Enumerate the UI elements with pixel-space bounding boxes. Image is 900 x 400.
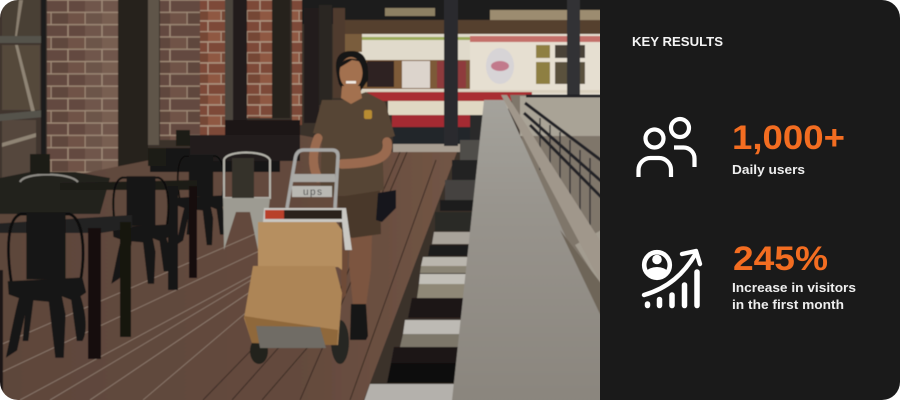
- background: ceiling and wall: [0, 0, 610, 400]
- upper box: [258, 222, 342, 270]
- steel bins along bench: [361, 115, 484, 400]
- label: increase in visitors: Increase in visitors: [732, 280, 856, 295]
- wooden deck floor: [0, 135, 457, 400]
- ups plate: ups: [303, 187, 322, 198]
- stat: 1,000+: 1,000+: [732, 119, 845, 157]
- label: increase in visitors: in the first month: [732, 297, 844, 312]
- railing and area right of bench: [510, 94, 600, 283]
- cafe tables and chairs: [0, 120, 300, 400]
- hand cart with boxes: [244, 150, 352, 364]
- lower box: [244, 266, 342, 345]
- shorts: [337, 188, 381, 238]
- arms: [313, 138, 387, 178]
- base plate: [256, 326, 326, 348]
- wooden bench top: [451, 95, 610, 400]
- panel: key results: [600, 0, 900, 400]
- UPS badge: [364, 110, 372, 119]
- stat: 245%: 245%: [733, 240, 828, 278]
- food stall building: [345, 34, 610, 152]
- legs and boots: [340, 235, 372, 340]
- head and hair: [336, 51, 368, 104]
- brick columns and dark posts: [46, 0, 581, 174]
- icon: visitor growth chart: [644, 251, 700, 306]
- label: daily users: Daily users: [732, 162, 805, 177]
- heading: KEY RESULTS: [632, 35, 723, 49]
- wheels: [250, 342, 268, 364]
- shipping label strip: [263, 208, 352, 250]
- courier: [313, 51, 396, 340]
- photo: UPS courier on restaurant patio: [0, 0, 610, 400]
- shirt: [313, 92, 395, 196]
- icon: users: [638, 119, 695, 177]
- ups plate: [292, 174, 335, 198]
- left window: [0, 0, 46, 190]
- tool pouch: [376, 190, 396, 222]
- cart handle: [287, 150, 338, 208]
